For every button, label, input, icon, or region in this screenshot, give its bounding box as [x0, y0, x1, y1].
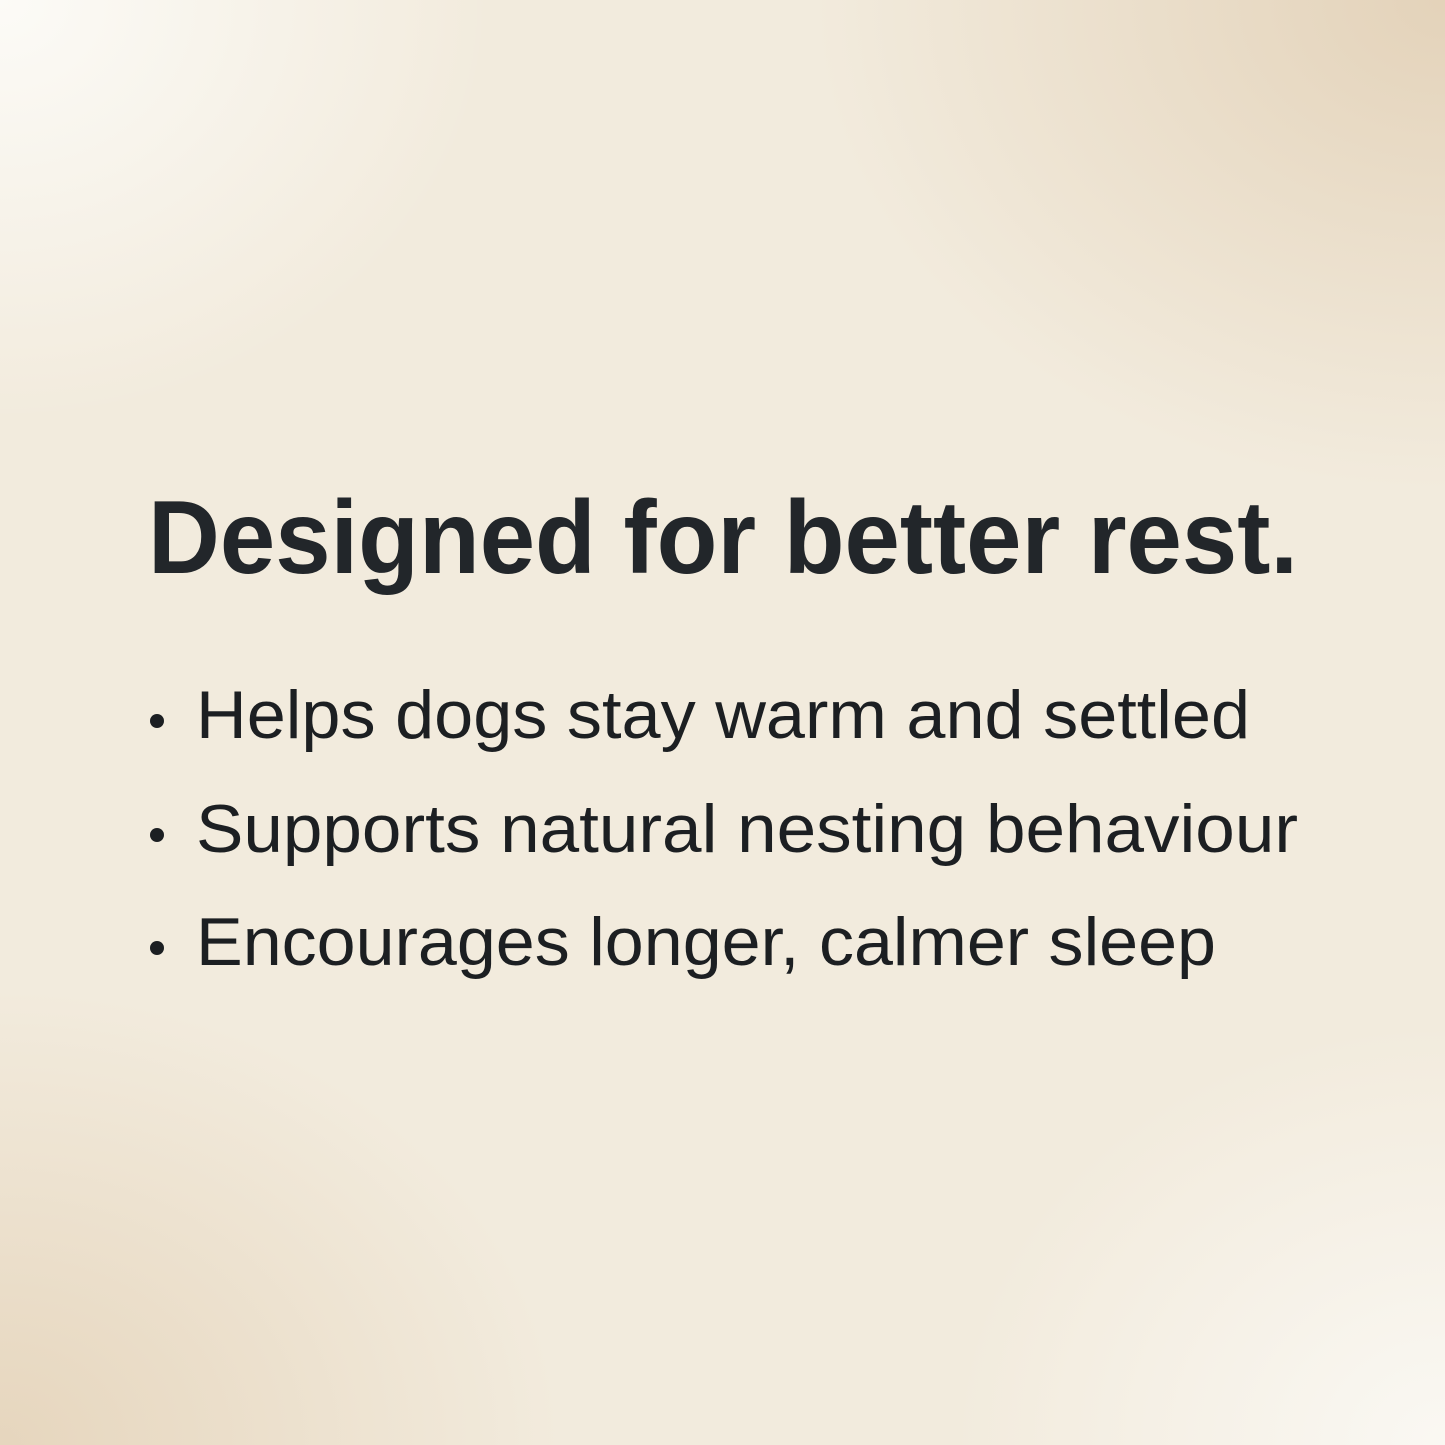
bullet 2: Supports natural nesting behaviour — [196, 791, 1298, 867]
bullet 1: Helps dogs stay warm and settled — [196, 677, 1250, 753]
bullet 3: Encourages longer, calmer sleep — [196, 904, 1216, 980]
bullet list — [150, 677, 1298, 980]
title: Designed for better rest. — [148, 480, 1298, 596]
